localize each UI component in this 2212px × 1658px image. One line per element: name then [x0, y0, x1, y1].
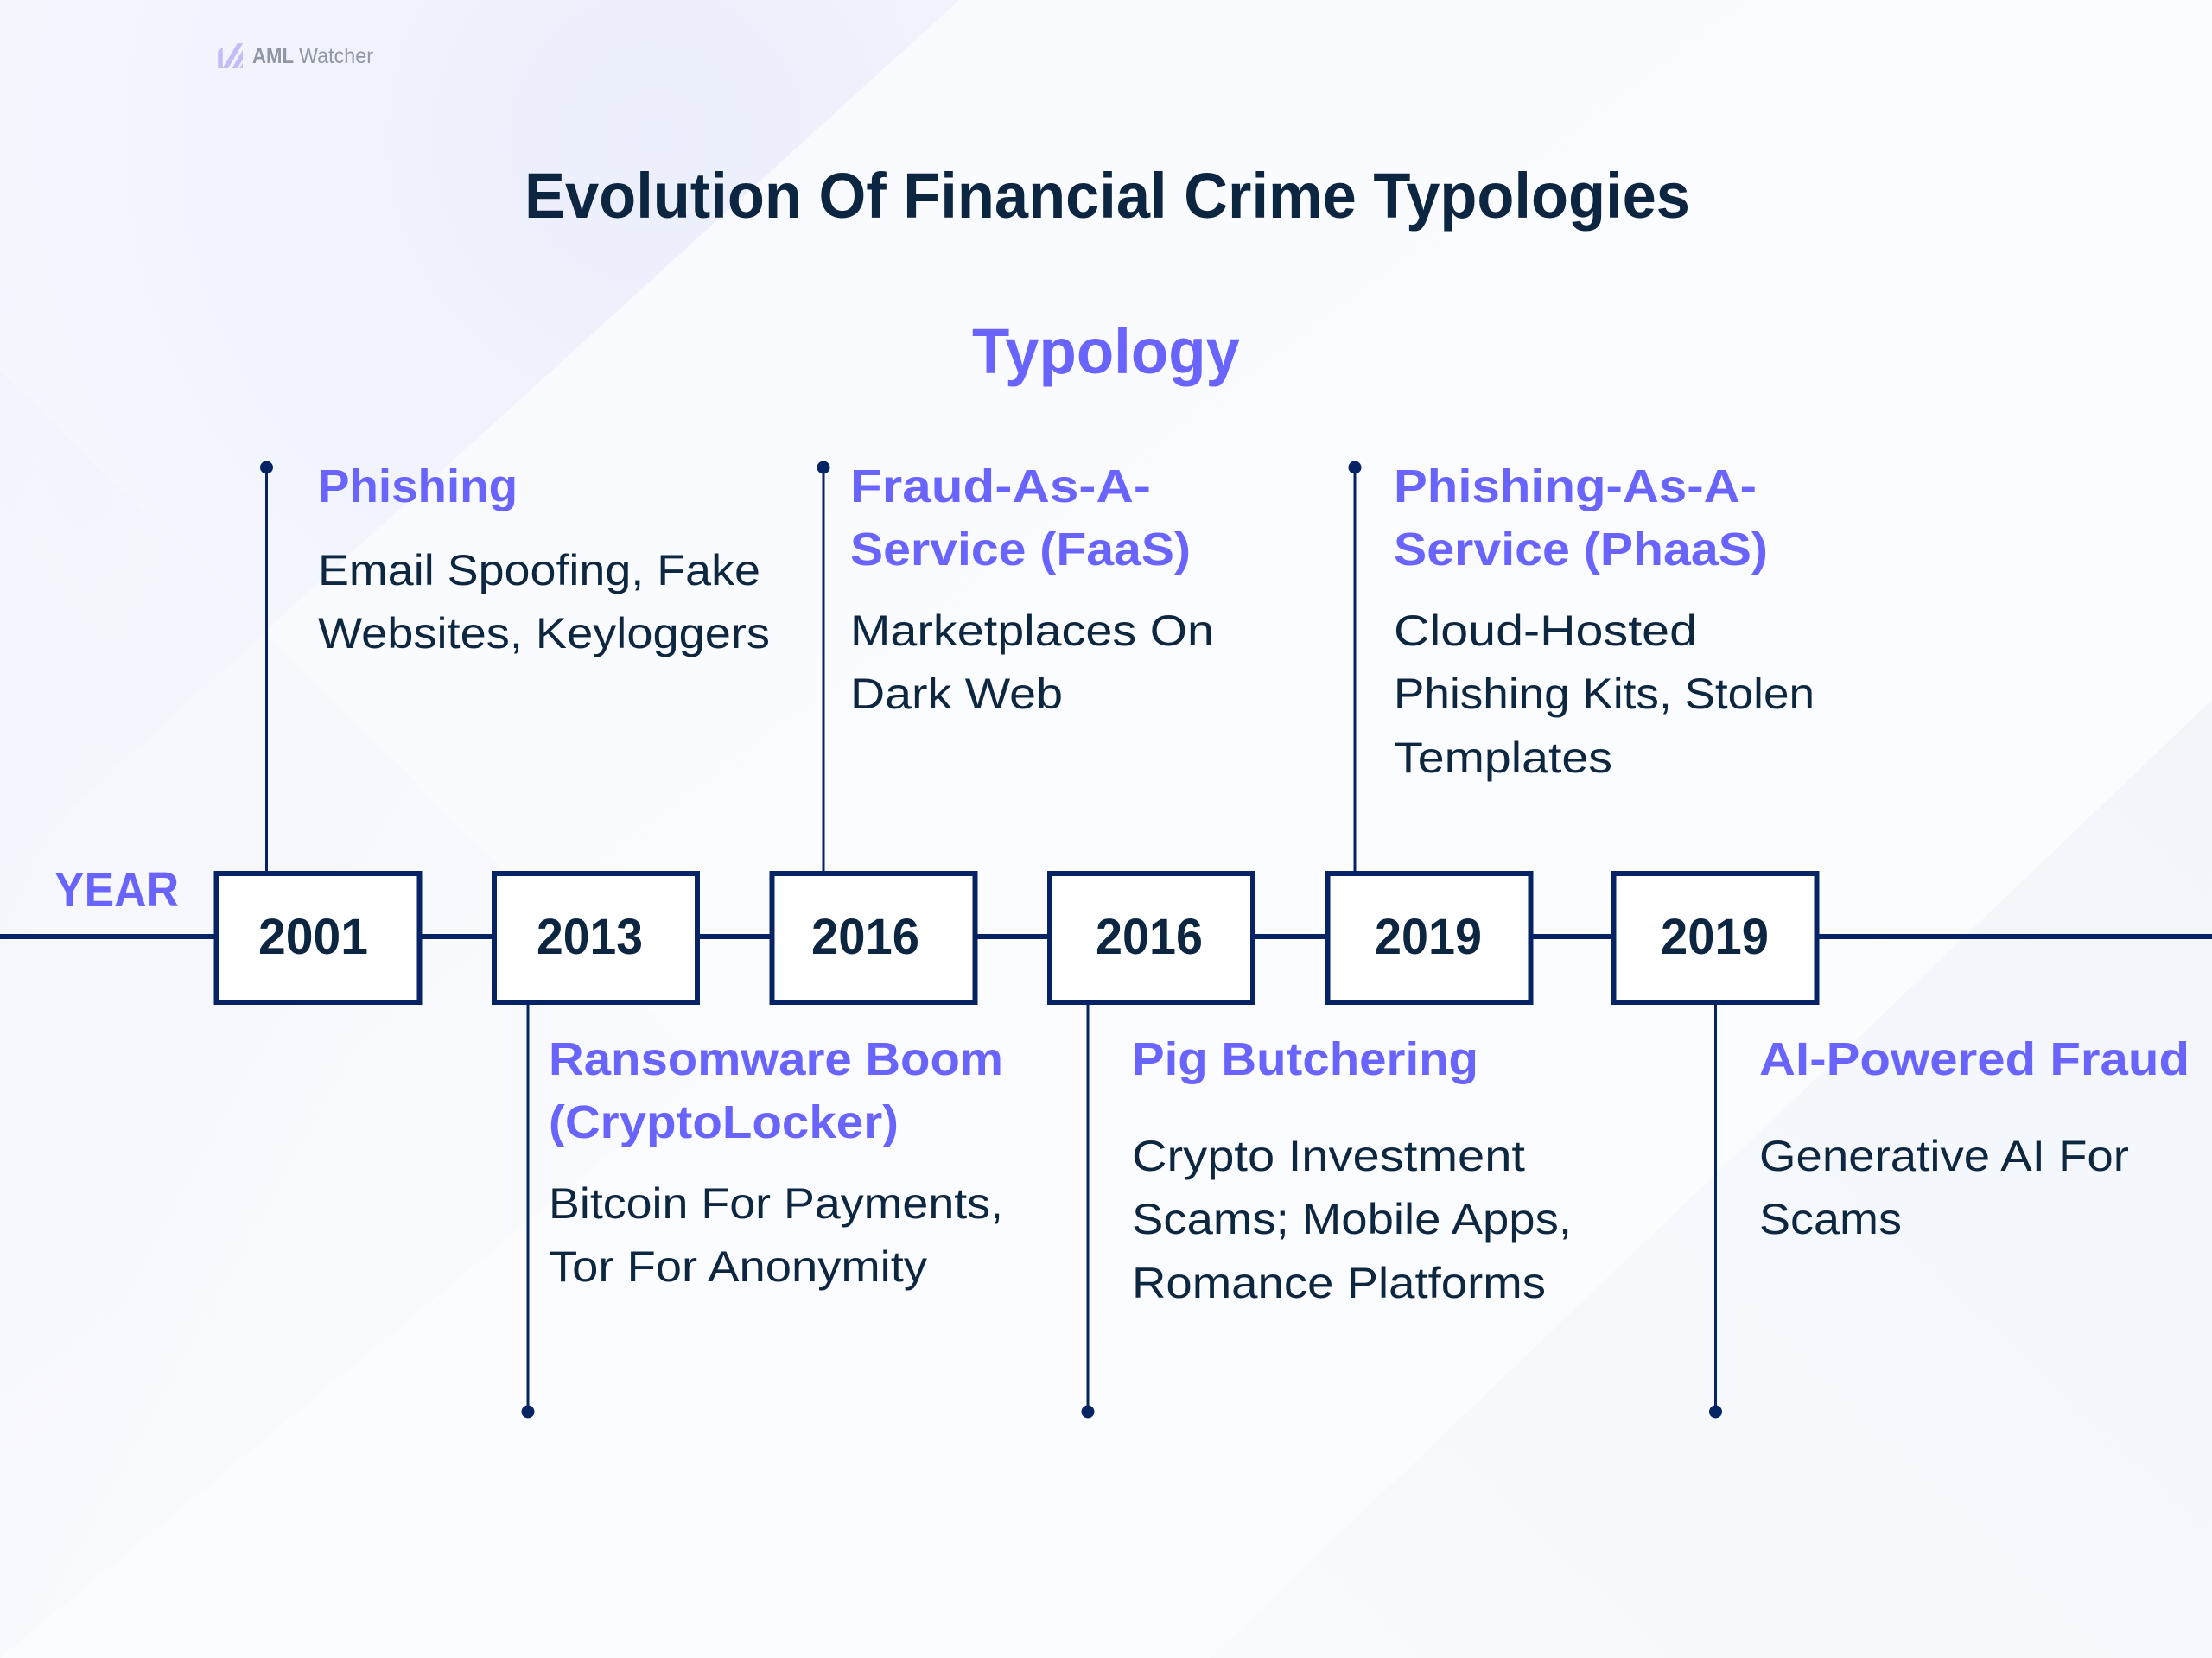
description: Scams [1759, 1195, 1902, 1243]
dot [817, 461, 830, 473]
description: Email Spoofing, Fake [318, 546, 760, 594]
typology name [850, 461, 1191, 575]
typology name: Service (PhaaS) [1394, 524, 1768, 575]
description [850, 607, 1214, 718]
connector [823, 467, 824, 873]
dot [260, 461, 273, 473]
description: Romance Platforms [1132, 1259, 1546, 1307]
connector [1714, 1002, 1717, 1411]
milestone: Phishing-As-A-Service [1348, 461, 1815, 873]
year box: 2016 [772, 873, 975, 1002]
dot [522, 1405, 534, 1419]
description [1394, 607, 1815, 782]
description [1759, 1132, 2129, 1243]
description: Phishing Kits, Stolen [1394, 670, 1815, 718]
connector [265, 467, 268, 873]
typology name: Service (FaaS) [850, 524, 1191, 575]
year box: 2001 [216, 873, 420, 1002]
milestone: Pig Butchering [1082, 1002, 1572, 1419]
heading: Typology: Typology [972, 315, 1240, 387]
title: Evolution Of Financial Crime Typologies [524, 160, 1690, 232]
year box: 2013: 2013 [537, 909, 643, 965]
year box: 2019: 2019 [1661, 909, 1769, 965]
typology name [549, 1033, 1003, 1148]
logo wordmark: AML [252, 44, 294, 68]
dot [1082, 1405, 1094, 1419]
year box: 2019 [1327, 873, 1531, 1002]
logo: AML Watcher [218, 43, 373, 68]
connector [1087, 1002, 1089, 1411]
typology name [1394, 461, 1768, 575]
year box: 2019 [1614, 873, 1816, 1002]
typology name: (CryptoLocker) [549, 1096, 899, 1148]
typology name: AI-Powered Fraud [1759, 1033, 2190, 1085]
description: Marketplaces On [850, 607, 1214, 655]
year box: 2019: 2019 [1375, 909, 1482, 965]
logo wordmark [252, 44, 373, 68]
milestone: Ransomware Boom [522, 1002, 1003, 1419]
icon: striped logo mark [218, 43, 243, 68]
connector [1353, 467, 1357, 873]
year box: 2013 [494, 873, 697, 1002]
typology name: Pig Butchering [1132, 1033, 1478, 1085]
year box: 2016: 2016 [1096, 909, 1203, 965]
timeline axis [0, 934, 2212, 939]
description [1132, 1132, 1572, 1307]
description [549, 1179, 1003, 1291]
dot [1709, 1405, 1722, 1419]
connector [527, 1002, 529, 1411]
typology name: Ransomware Boom [549, 1033, 1003, 1085]
description: Cloud-Hosted [1394, 607, 1697, 655]
description: Generative AI For [1759, 1132, 2129, 1180]
dot [1348, 461, 1362, 473]
description: Crypto Investment [1132, 1132, 1525, 1180]
milestone: Phishing [260, 461, 770, 873]
description: Tor For Anonymity [549, 1242, 927, 1291]
milestone: AI-Powered Fraud [1709, 1002, 2190, 1419]
typology name: Phishing-As-A- [1394, 461, 1757, 512]
logo wordmark: Watcher [299, 44, 373, 68]
description: Bitcoin For Payments, [549, 1179, 1003, 1228]
description [318, 546, 770, 657]
year box: 2001: 2001 [258, 909, 368, 965]
description: Templates [1394, 734, 1612, 782]
year box: 2016: 2016 [811, 909, 919, 965]
description: Websites, Keyloggers [318, 609, 770, 657]
year box: 2016 [1050, 873, 1253, 1002]
description: Scams; Mobile Apps, [1132, 1195, 1572, 1243]
label: YEAR: YEAR [54, 862, 179, 918]
milestone: Fraud-As-A-Service [817, 461, 1214, 873]
typology name: Phishing [318, 461, 518, 512]
typology name: Fraud-As-A- [850, 461, 1151, 512]
description: Dark Web [850, 670, 1063, 718]
